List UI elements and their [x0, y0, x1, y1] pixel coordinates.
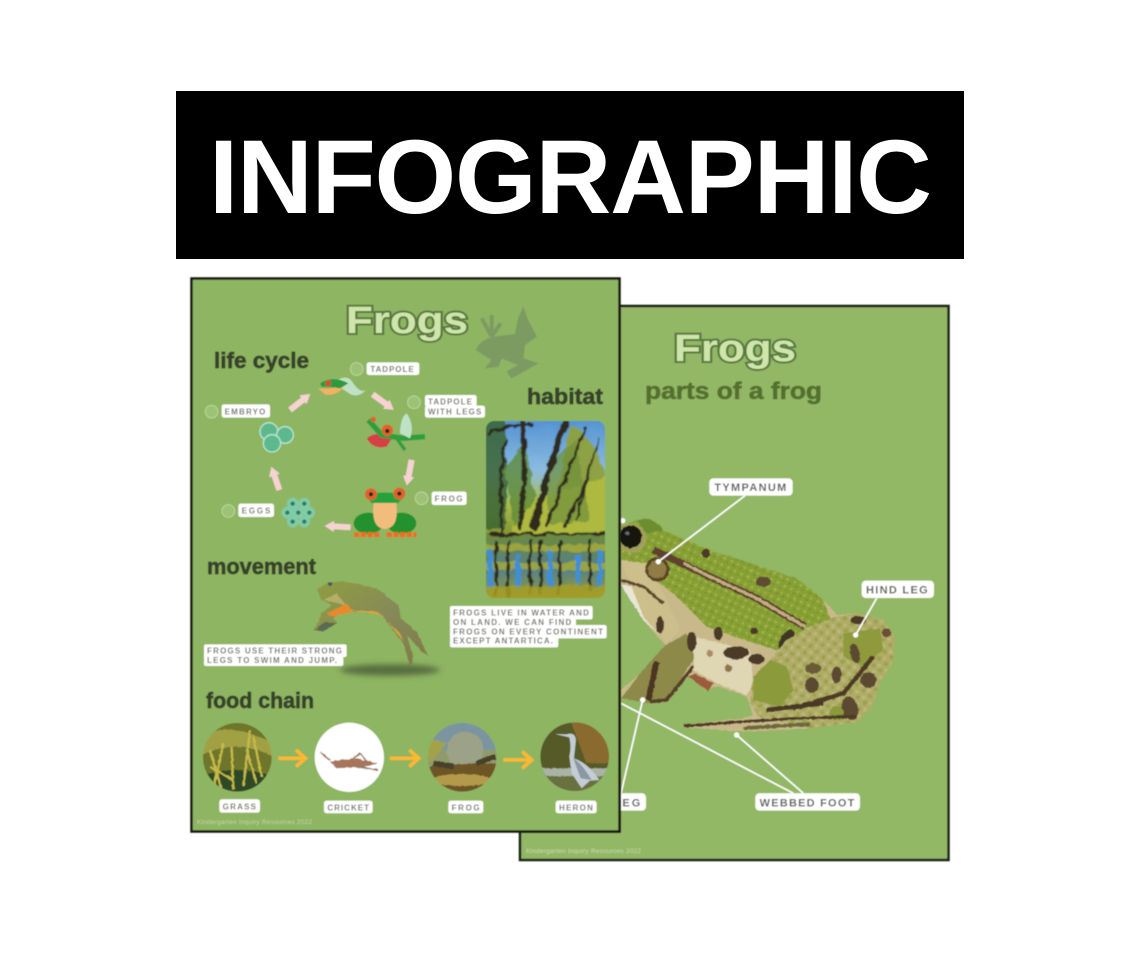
- habitat text: FROGS ON EVERY CONTINENT: [453, 627, 603, 636]
- step markers: [205, 363, 428, 517]
- label: heron: [556, 801, 597, 813]
- label: grass: GRASS: [223, 803, 257, 812]
- label: cricket: CRICKET: [327, 803, 369, 812]
- label: eggs: EGGS: [242, 507, 271, 516]
- label: tadpole: [367, 362, 419, 375]
- heading: food chain: food chain: [206, 688, 314, 713]
- label: frog: FROG: [435, 495, 463, 504]
- frog silhouette: [476, 307, 538, 378]
- icon: frog: [354, 488, 417, 535]
- food chain: [200, 720, 612, 813]
- banner: INFOGRAPHIC: [176, 91, 964, 259]
- movement text: [204, 644, 347, 666]
- banner: INFOGRAPHIC: INFOGRAPHIC: [209, 119, 932, 236]
- arrow: [503, 754, 532, 765]
- movement text: FROGS USE THEIR STRONG: [207, 646, 342, 655]
- label: hind leg: HIND LEG: [866, 584, 928, 596]
- icon: eggs: [283, 500, 313, 526]
- label: webbed foot: [755, 793, 860, 811]
- cricket circle: [315, 723, 384, 792]
- label: hind leg: [862, 581, 934, 598]
- heron circle: [538, 720, 612, 792]
- footer credit: Kindergarten Inquiry Resources 2022: [197, 819, 312, 826]
- label: front leg: FRONT LEG: [560, 797, 640, 809]
- habitat text: FROGS LIVE IN WATER AND: [453, 609, 589, 618]
- jumping frog with shadow: [313, 581, 440, 676]
- label: tadpole with legs: WITH LEGS: [428, 407, 482, 416]
- icon: embryo: [260, 423, 293, 452]
- arrow: [390, 753, 419, 764]
- frog photo: [617, 519, 895, 732]
- habitat text: EXCEPT ANTARTICA.: [453, 637, 553, 646]
- cycle arrows: [274, 394, 412, 527]
- icon: tadpole with legs: [367, 413, 425, 450]
- label: frog: FROG: [452, 803, 480, 812]
- arrow: [278, 753, 305, 764]
- habitat photo: [486, 420, 606, 598]
- label: tadpole with legs: TADPOLE: [428, 397, 473, 406]
- label: tympanum: TYMPANUM: [714, 482, 786, 494]
- infographic canvas: [176, 91, 964, 862]
- label: embryo: EMBRYO: [225, 407, 265, 416]
- label: grass: [219, 799, 260, 813]
- label: embryo: [222, 404, 270, 418]
- life cycle diagram: [205, 362, 485, 535]
- label: eggs: [238, 504, 274, 517]
- label: cricket: [324, 801, 373, 813]
- label: tadpole: TADPOLE: [370, 365, 414, 374]
- icon: tadpole: [318, 377, 366, 395]
- heading: movement: movement: [207, 554, 317, 579]
- panel: frog facts poster: [192, 278, 620, 832]
- poster title: Frogs: Frogs: [674, 328, 796, 370]
- label: frog: [432, 492, 467, 505]
- label: frog: [448, 801, 483, 813]
- movement text: LEGS TO SWIM AND JUMP.: [207, 656, 337, 665]
- heading: habitat: habitat: [527, 384, 604, 409]
- label: tympanum: [709, 478, 793, 496]
- panel: parts of a frog poster: [520, 306, 948, 860]
- grass circle: [202, 722, 272, 792]
- frog circle: [428, 722, 497, 792]
- habitat text: ON LAND. WE CAN FIND: [453, 618, 572, 627]
- habitat text: [450, 606, 607, 647]
- subtitle: parts of a frog: parts of a frog: [645, 378, 822, 405]
- label: tadpole with legs: [425, 395, 485, 418]
- label: heron: HERON: [559, 803, 593, 812]
- footer credit: Kindergarten Inquiry Resources 2022: [526, 848, 641, 855]
- poster title: Frogs: Frogs: [346, 300, 468, 342]
- callout lines and labels: [553, 478, 934, 811]
- label: front leg: [553, 793, 646, 811]
- heading: life cycle: life cycle: [214, 348, 309, 373]
- label: webbed foot: WEBBED FOOT: [760, 797, 855, 809]
